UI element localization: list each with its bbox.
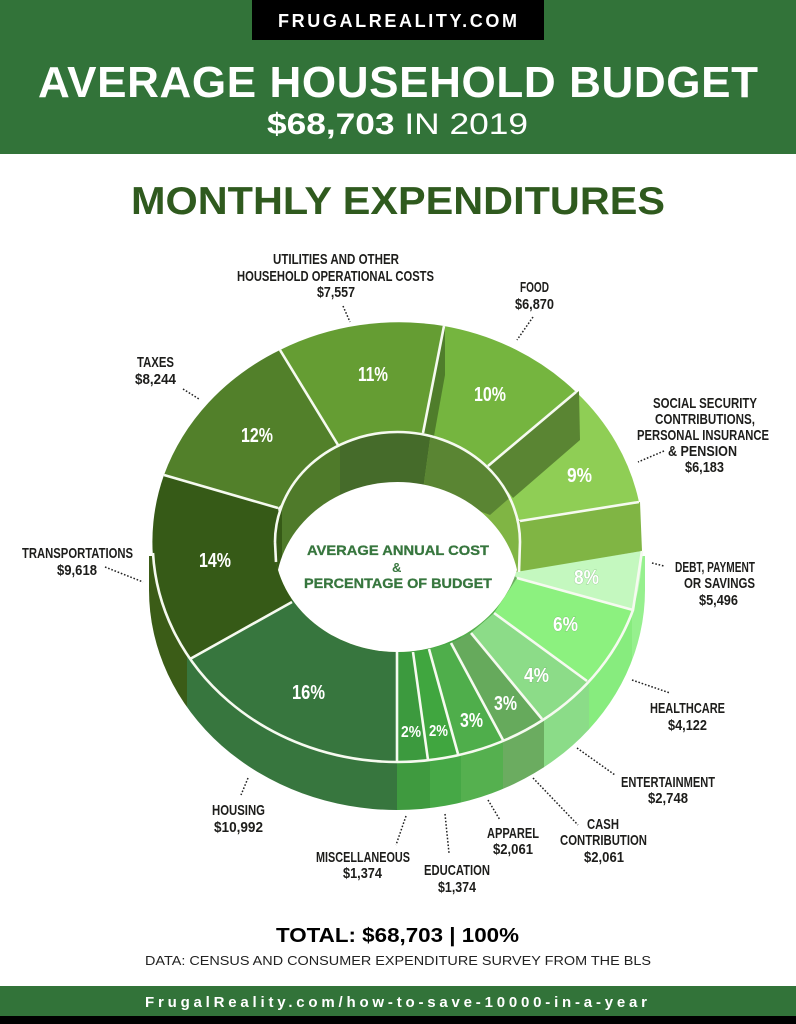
- centre hole: [278, 482, 517, 652]
- slice: debt payment or savings 8%: [510, 551, 642, 610]
- label: taxes: [135, 354, 177, 388]
- percentage labels: 2%: [401, 724, 421, 741]
- label: housing: [212, 802, 265, 836]
- raised wall under social security: [510, 502, 642, 573]
- percentage labels: 12%: [241, 425, 273, 447]
- site name badge: FRUGALREALITY.COM: [278, 11, 517, 31]
- label: miscellaneous: [316, 849, 410, 882]
- percentage labels: 10%: [474, 384, 506, 406]
- total line: TOTAL: $68,703 | 100%: [276, 925, 519, 947]
- label: housing: $10,992: [214, 819, 263, 836]
- outer side wall: [149, 556, 645, 810]
- slice: utilities 11%: [280, 322, 444, 445]
- label: transportations: $9,618: [57, 562, 97, 579]
- slice: taxes 12%: [164, 350, 338, 508]
- centre caption: PERCENTAGE OF BUDGET: [304, 575, 492, 591]
- label: taxes: TAXES: [137, 354, 174, 371]
- label: transportations: TRANSPORTATIONS: [22, 545, 133, 562]
- footer band: [0, 986, 796, 1024]
- slice: social security 9%: [488, 392, 639, 521]
- slice: housing 16%: [190, 602, 397, 762]
- label: education: [424, 862, 490, 896]
- centre caption: AVERAGE ANNUAL COST: [307, 542, 489, 558]
- slice: transportations 14%: [152, 475, 292, 659]
- label: food: FOOD: [520, 279, 549, 296]
- label: social security: CONTRIBUTIONS,: [655, 411, 755, 428]
- label: entertainment: [621, 774, 715, 807]
- label: taxes: $8,244: [135, 371, 177, 388]
- budget subtitle: $68,703 IN 2019: [267, 108, 528, 141]
- dotted leader lines: [105, 306, 670, 853]
- header band: [0, 0, 796, 154]
- percentage labels: 3%: [494, 693, 517, 715]
- label: utilities: UTILITIES AND OTHER: [273, 251, 399, 268]
- label: debt: DEBT, PAYMENT: [675, 559, 755, 576]
- label: utilities: [237, 251, 434, 301]
- label: cash contribution: [560, 816, 647, 866]
- label: transportations: [22, 545, 133, 579]
- section heading: MONTHLY EXPENDITURES: [131, 180, 665, 223]
- label: miscellaneous: MISCELLANEOUS: [316, 849, 410, 866]
- percentage labels: 9%: [567, 465, 592, 487]
- label: debt: $5,496: [699, 592, 738, 609]
- slice: food 10%: [423, 326, 576, 466]
- centre caption: &: [392, 560, 401, 575]
- footer url: FrugalReality.com/how-to-save-10000-in-a-year: [145, 994, 647, 1011]
- label: apparel: $2,061: [493, 841, 533, 858]
- percentage labels: 4%: [524, 665, 549, 687]
- label: cash contribution: $2,061: [584, 849, 624, 866]
- label: social security: & PENSION: [668, 443, 737, 460]
- slice: miscellaneous 2%: [397, 652, 428, 762]
- data source note: DATA: CENSUS AND CONSUMER EXPENDITURE SURVEY FROM THE BLS: [145, 953, 651, 968]
- label: apparel: APPAREL: [487, 825, 539, 842]
- label: social security: [637, 395, 769, 476]
- label: utilities: HOUSEHOLD OPERATIONAL COSTS: [237, 268, 434, 285]
- percentage labels: 16%: [292, 682, 325, 704]
- slice: cash contribution 3%: [451, 633, 542, 740]
- label: social security: $6,183: [685, 459, 724, 476]
- slice: healthcare 6%: [494, 578, 633, 681]
- raised wall under utilities: [423, 327, 445, 436]
- donut chart: [140, 322, 652, 830]
- slice: entertainment 4%: [471, 613, 587, 719]
- label: healthcare: [650, 700, 725, 734]
- label: healthcare: $4,122: [668, 717, 707, 734]
- label: debt: [675, 559, 755, 609]
- slice: education 2%: [413, 649, 458, 760]
- centre caption: [304, 542, 492, 591]
- label: housing: HOUSING: [212, 802, 265, 819]
- label: healthcare: HEALTHCARE: [650, 700, 725, 717]
- percentage labels: 11%: [358, 364, 388, 386]
- label: food: [515, 279, 554, 313]
- label: food: $6,870: [515, 296, 554, 313]
- label: education: EDUCATION: [424, 862, 490, 879]
- label: social security: SOCIAL SECURITY: [653, 395, 757, 412]
- label: cash contribution: CASH: [587, 816, 619, 833]
- label: apparel: [487, 825, 539, 858]
- percentage labels: 2%: [429, 723, 448, 740]
- percentage labels: 14%: [199, 550, 231, 572]
- raised wall under food: [488, 391, 580, 498]
- white slice dividers: [153, 326, 642, 762]
- percentage labels: 8%: [574, 567, 599, 589]
- label: utilities: $7,557: [317, 284, 355, 301]
- label: entertainment: $2,748: [648, 790, 688, 807]
- percentage labels: 6%: [553, 614, 578, 636]
- label: miscellaneous: $1,374: [343, 865, 383, 882]
- label: cash contribution: CONTRIBUTION: [560, 832, 647, 849]
- site name badge: [252, 0, 544, 40]
- main title: AVERAGE HOUSEHOLD BUDGET: [38, 58, 758, 107]
- label: entertainment: ENTERTAINMENT: [621, 774, 715, 791]
- percentage labels: 3%: [460, 710, 483, 732]
- label: education: $1,374: [438, 879, 477, 896]
- slice: apparel 3%: [429, 643, 503, 754]
- percentage labels: [199, 364, 599, 741]
- inner side wall: [276, 433, 518, 652]
- label: debt: OR SAVINGS: [684, 575, 755, 592]
